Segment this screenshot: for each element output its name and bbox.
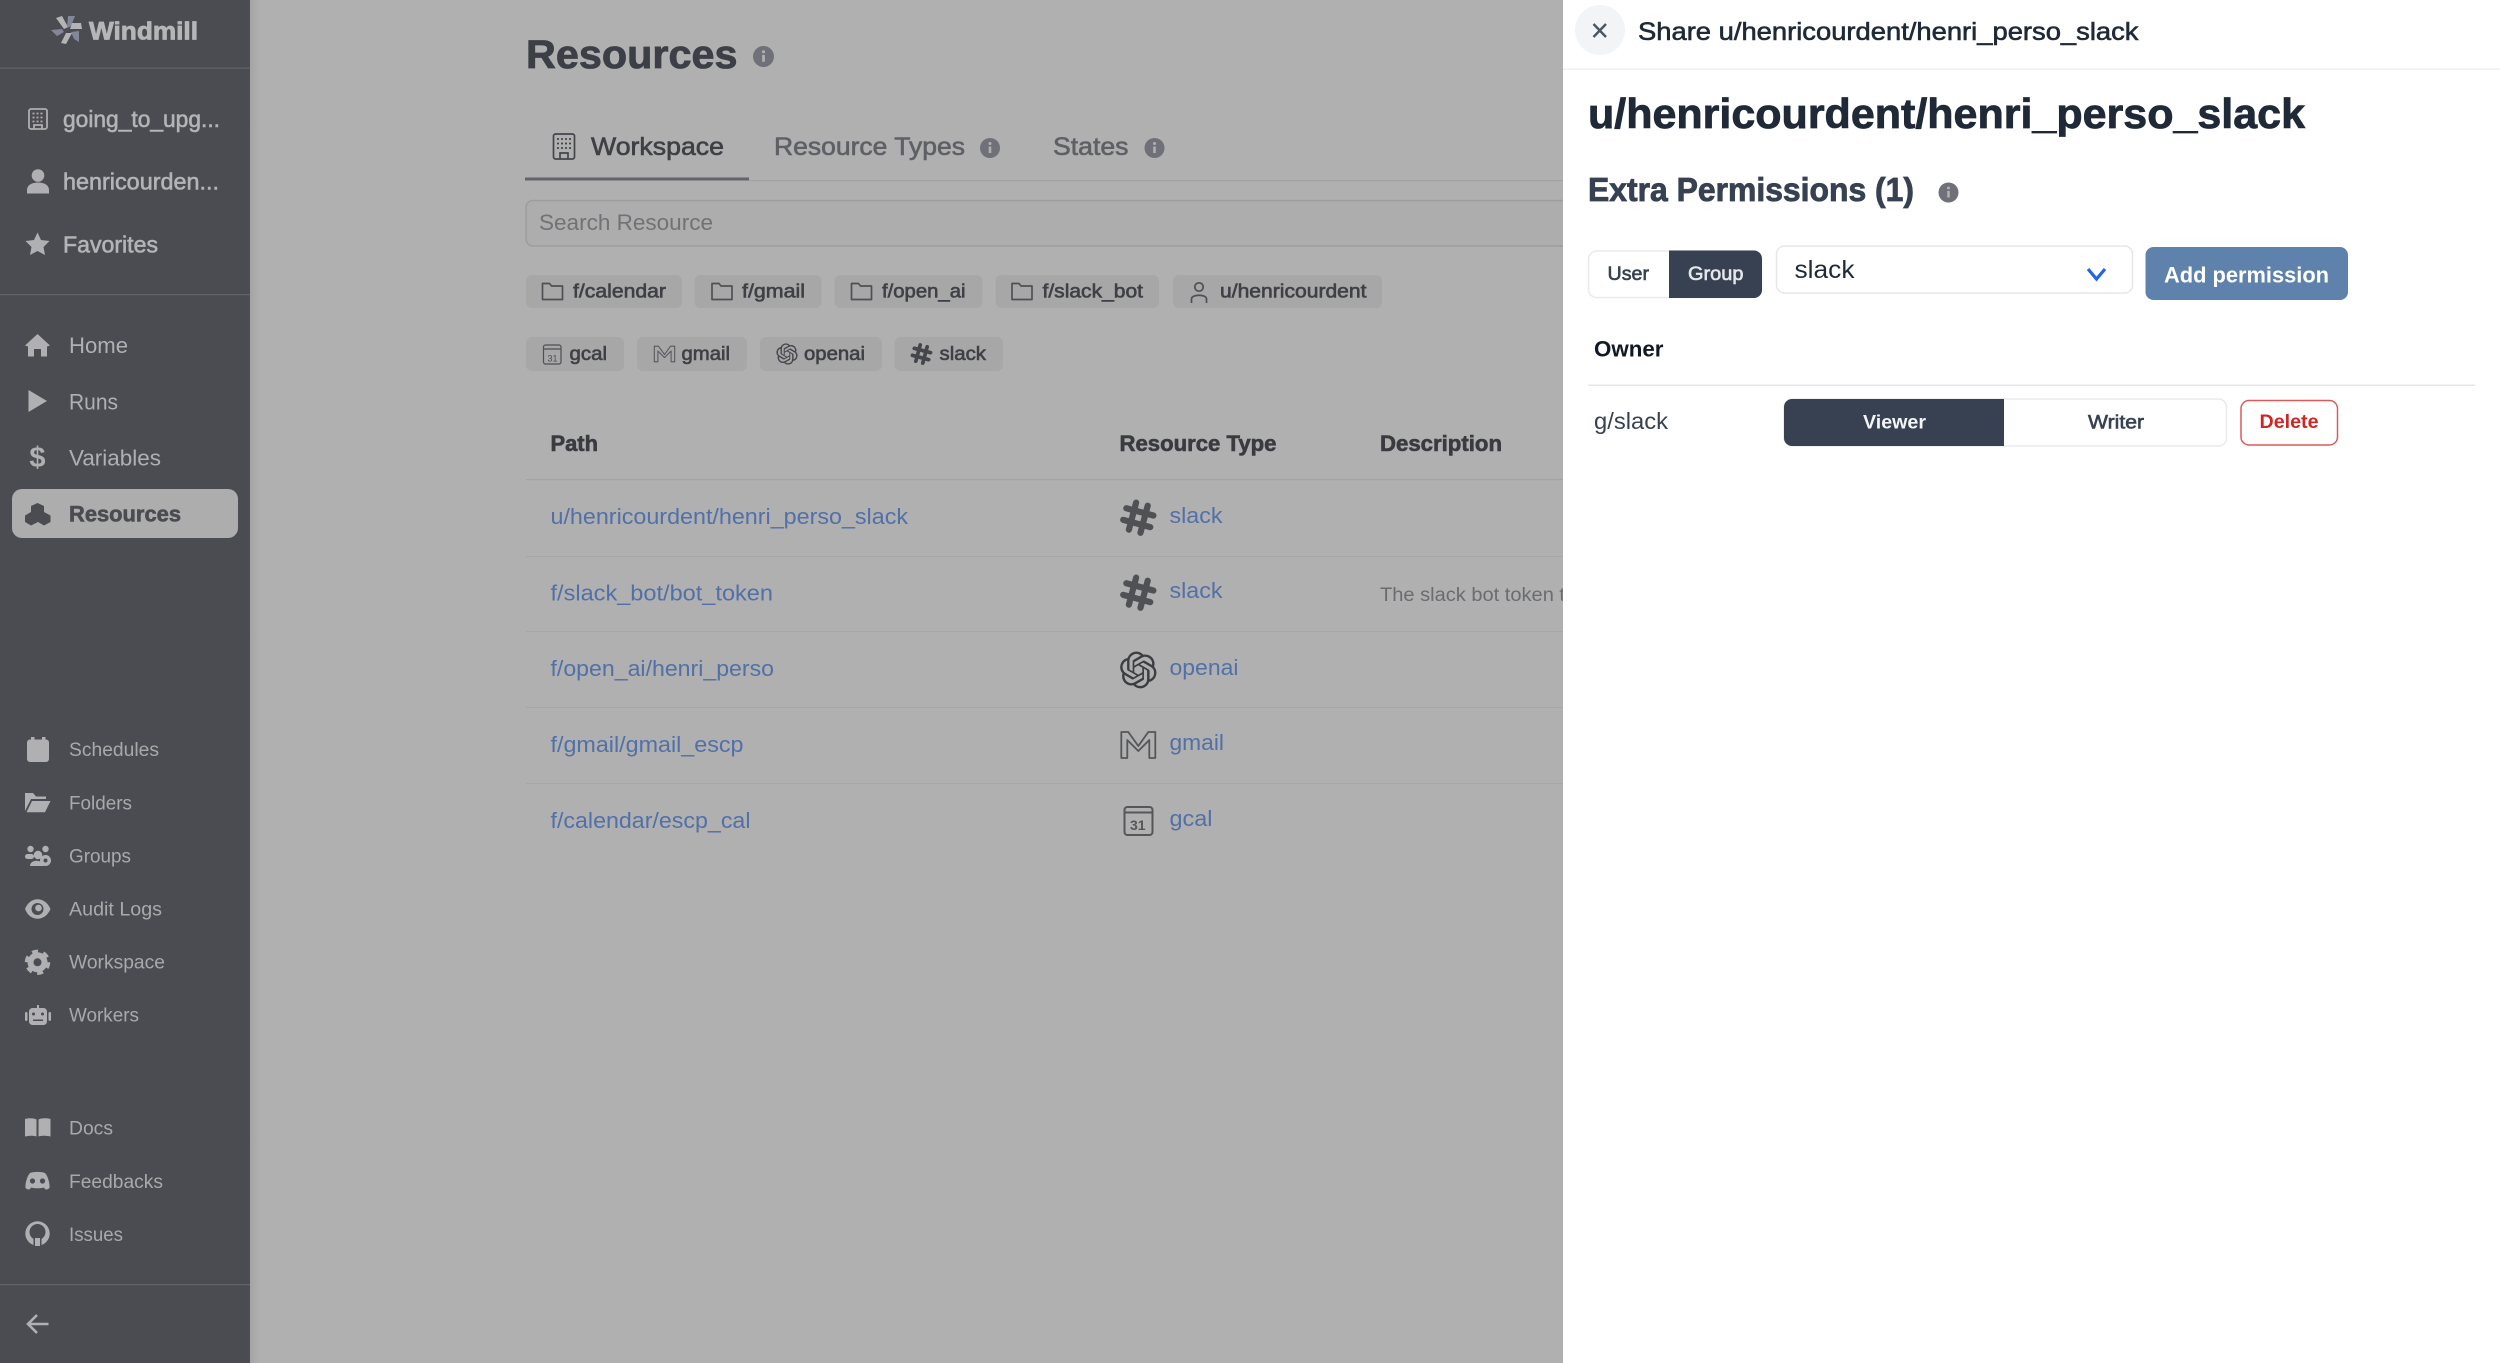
- chip: gmail: [637, 337, 747, 371]
- icon: users gear: [25, 846, 51, 866]
- group select: [1776, 246, 2132, 293]
- icon: info: [1938, 182, 1958, 202]
- label: resources: Resources: [69, 502, 181, 526]
- row: escp_cal: [550, 806, 1212, 835]
- tab: states: [1053, 133, 1164, 161]
- search input: [526, 200, 1626, 246]
- heading: extra permissions: Extra Permissions (1): [1588, 171, 1914, 208]
- chip: f/calendar: f/calendar: [573, 282, 667, 302]
- label: workers: Workers: [69, 1004, 139, 1026]
- label: workspace: going_to_upg...: [63, 106, 220, 132]
- tab: resource types: Resource Types: [774, 133, 965, 161]
- chip: slack: [894, 337, 1003, 371]
- row: gmail_escp: [550, 730, 1224, 758]
- label: schedules: Schedules: [69, 739, 159, 761]
- menu: workers: [25, 1004, 139, 1026]
- resource path heading: u/henricourdent/henri_perso_slack: [1588, 90, 2306, 137]
- description text: The slack bot token t: [1380, 585, 1566, 606]
- add permission button: [2146, 247, 2348, 300]
- chip: f/slack_bot: [996, 275, 1159, 308]
- chip: u/henricourdent: [1173, 275, 1382, 308]
- table header: Description: [1380, 431, 1502, 456]
- icon: building: [29, 109, 47, 129]
- icon: play: [28, 390, 47, 412]
- icon: chevron: [2088, 269, 2105, 279]
- tab: states: States: [1053, 133, 1128, 161]
- label: folders: Folders: [69, 792, 132, 814]
- icon: star: [26, 232, 50, 255]
- resources table: [526, 431, 1566, 835]
- row: escp_cal: f/calendar/escp_cal: [550, 808, 750, 833]
- icon: eye: [25, 899, 50, 919]
- menu: user: [27, 168, 219, 194]
- chip: gcal: gcal: [570, 344, 607, 365]
- delete button: Delete: [2260, 412, 2318, 433]
- table header: Resource Type: [1120, 431, 1276, 456]
- label: variables: Variables: [69, 446, 161, 470]
- heading: resources: Resources: [526, 33, 738, 77]
- viewer writer toggle: [1784, 399, 2226, 446]
- folder filter chips: [526, 275, 1382, 308]
- row: escp_cal: 31: [1130, 817, 1146, 833]
- row: henri_perso: f/open_ai/henri_perso: [550, 656, 774, 681]
- icon: dollar: $: [29, 442, 46, 474]
- user group toggle: User: [1608, 264, 1650, 285]
- tab: workspace: Workspace: [591, 133, 724, 161]
- icon: windmill logo: [51, 16, 82, 44]
- chip: f/open_ai: [834, 275, 982, 308]
- menu: favorites: [26, 232, 158, 258]
- chip: f/gmail: [694, 275, 822, 308]
- group select: slack: [1794, 256, 1855, 284]
- row: henri_perso_slack: slack: [1170, 503, 1224, 528]
- menu: docs: [25, 1118, 113, 1140]
- chip: f/gmail: f/gmail: [742, 282, 805, 302]
- search input: Search Resource: [539, 210, 713, 235]
- chip: openai: [760, 337, 882, 371]
- menu: runs: [28, 390, 118, 414]
- user group toggle: Group: [1688, 264, 1744, 285]
- owner column heading: Owner: [1594, 336, 1664, 362]
- label: favorites: Favorites: [63, 232, 158, 258]
- chip: openai: openai: [804, 344, 865, 365]
- label: user: henricourden...: [63, 168, 219, 194]
- menu: workspace switcher: [29, 106, 220, 132]
- panel: share drawer: [1563, 0, 2500, 1363]
- menu: schedules: [27, 737, 159, 762]
- chip: f/open_ai: f/open_ai: [882, 282, 966, 302]
- icon: github: [25, 1221, 50, 1246]
- icon: collapse arrow: [28, 1315, 48, 1333]
- panel: sidebar: [0, 0, 250, 1363]
- row: escp_cal: gcal: [1170, 806, 1212, 831]
- chip: u/henricourdent: u/henricourdent: [1220, 282, 1367, 302]
- permission row: [1594, 399, 2338, 446]
- user group toggle: [1588, 250, 1762, 298]
- menu: groups: [25, 846, 131, 868]
- row: gmail_escp: f/gmail/gmail_escp: [550, 732, 744, 757]
- label: home: Home: [69, 333, 128, 358]
- label: workspace settings: Workspace: [69, 952, 165, 974]
- menu: feedbacks: [25, 1171, 163, 1193]
- row: henri_perso_slack: [550, 501, 1224, 535]
- row: gmail_escp: gmail: [1170, 730, 1224, 755]
- tabs: [554, 133, 1164, 161]
- drawer header: [1575, 5, 2139, 55]
- row: bot_token: slack: [1170, 578, 1224, 603]
- chip: gcal: [526, 337, 624, 371]
- menu: variables: [29, 442, 161, 474]
- icon: info: [753, 46, 774, 67]
- label: audit logs: Audit Logs: [69, 898, 162, 920]
- add permission button: Add permission: [2164, 262, 2329, 288]
- icon: user: [27, 169, 49, 194]
- icon: home: [25, 334, 50, 356]
- row: henri_perso_slack: u/henricourdent/henri_perso_slack: [550, 504, 909, 529]
- menu: issues: [25, 1221, 123, 1246]
- owner name: g/slack: [1594, 408, 1669, 434]
- icon: cubes: [25, 503, 50, 526]
- viewer writer toggle: Writer: [2088, 412, 2145, 434]
- menu: workspace settings: [26, 951, 165, 974]
- label: docs: Docs: [69, 1118, 113, 1140]
- chip: f/calendar: [526, 275, 682, 308]
- drawer title: Share u/henricourdent/henri_perso_slack: [1638, 18, 2139, 46]
- menu: home: [25, 333, 128, 358]
- menu: resources active: [12, 489, 238, 538]
- chip: slack: slack: [940, 344, 987, 365]
- row: henri_perso: [550, 652, 1238, 688]
- label: feedbacks: Feedbacks: [69, 1171, 163, 1193]
- label: groups: Groups: [69, 846, 131, 868]
- icon: open folder: [25, 793, 50, 812]
- close button: [1575, 5, 1625, 55]
- table header: Path: [550, 431, 598, 456]
- resource type filter chips: [526, 337, 1003, 371]
- label: runs: Runs: [69, 390, 118, 414]
- menu: audit logs: [25, 898, 162, 920]
- row: bot_token: [550, 576, 1566, 610]
- delete button: [2241, 400, 2338, 445]
- viewer writer toggle: Viewer: [1863, 412, 1927, 434]
- icon: gear: [26, 951, 48, 973]
- row: henri_perso: openai: [1170, 655, 1238, 680]
- panel: resources main: [525, 33, 1626, 835]
- menu: folders: [25, 792, 132, 814]
- icon: robot: [25, 1005, 51, 1025]
- icon: calendar: [27, 737, 49, 762]
- chip: gmail: gmail: [682, 344, 730, 365]
- label: issues: Issues: [69, 1224, 123, 1246]
- table header: [550, 431, 1502, 456]
- row: bot_token: f/slack_bot/bot_token: [550, 580, 773, 606]
- brand name: Windmill: [89, 18, 198, 46]
- chip: f/slack_bot: f/slack_bot: [1042, 282, 1144, 302]
- icon: discord: [25, 1172, 50, 1189]
- chip: gcal: 31: [548, 354, 558, 364]
- icon: book: [25, 1118, 50, 1136]
